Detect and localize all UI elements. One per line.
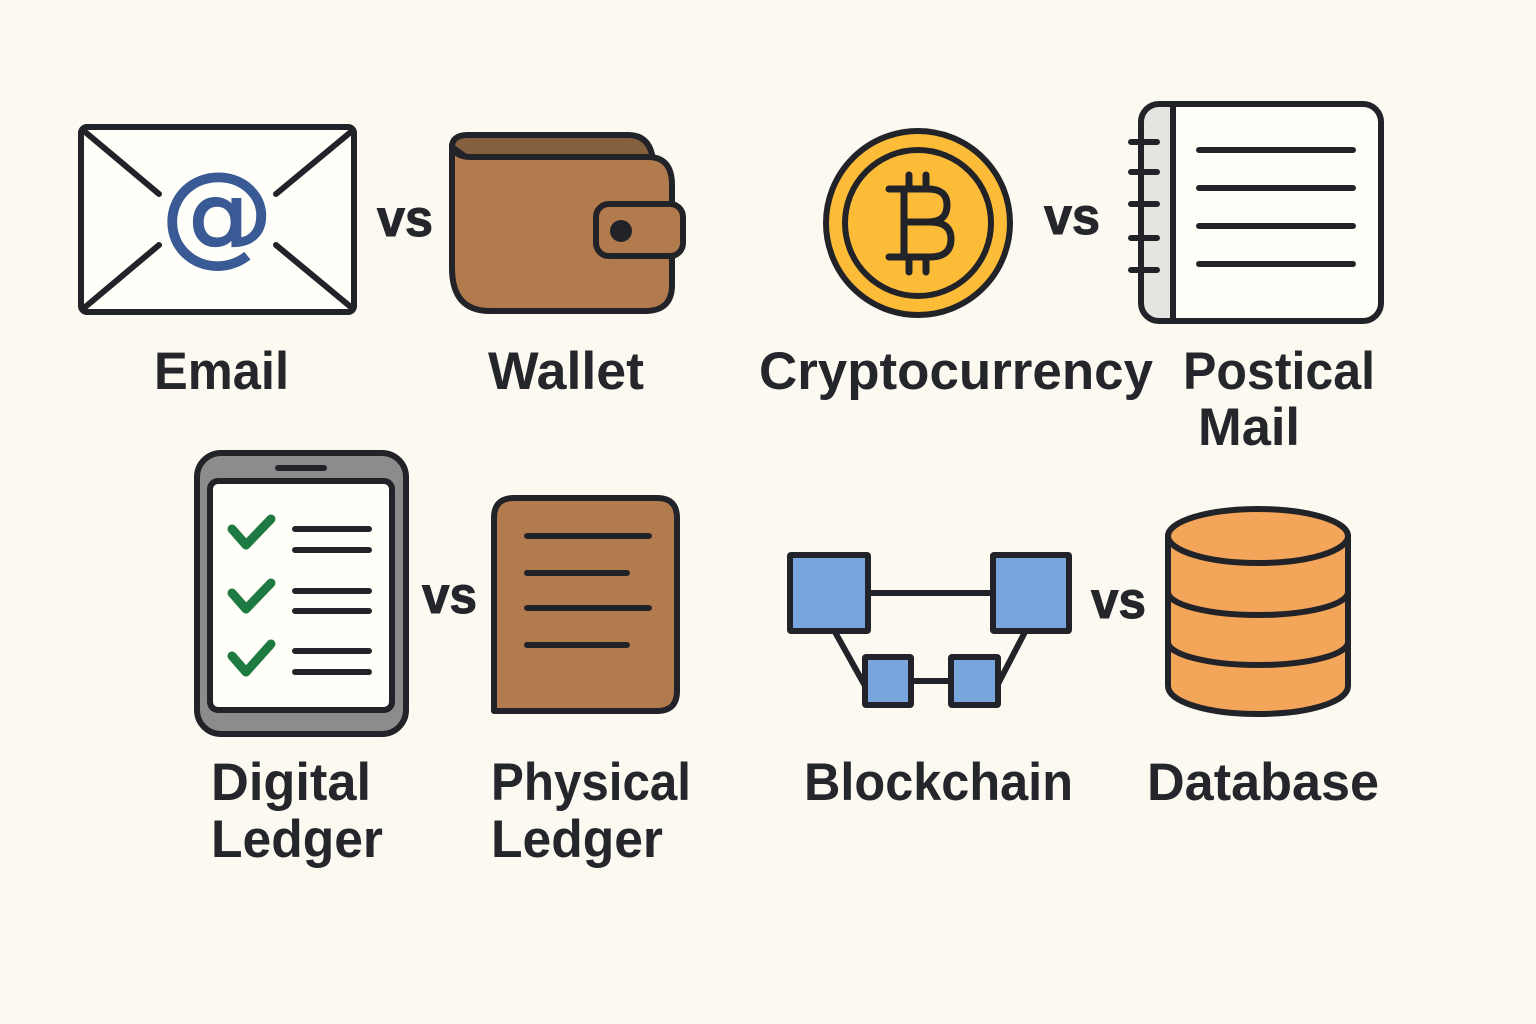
icon: envelope [81,127,354,312]
label: Postical Mail: Postical [1183,342,1375,401]
icon: blockchain network [790,555,1069,705]
panel: cryptocurrency vs postal mail [759,104,1381,457]
icon: database cylinder [1168,509,1348,714]
label: Digital Ledger: Ledger [211,810,383,869]
label: Postical Mail [1183,342,1375,457]
icon: wallet [452,135,683,311]
icon: notebook [1131,104,1381,321]
label: Physical Ledger [491,753,691,869]
vs label: vs [422,567,477,625]
label: Database: Database [1147,753,1379,812]
label: Digital Ledger: Digital [211,753,371,812]
label: Postical Mail: Mail [1198,398,1300,457]
label: Physical Ledger: Physical [491,753,691,812]
panel: blockchain vs database [790,509,1379,812]
label: Blockchain: Blockchain [804,753,1073,812]
icon: paper ledger [494,498,677,711]
label: Cryptocurrency: Cryptocurrency [759,342,1154,401]
icon: bitcoin coin [826,131,1010,315]
icon: envelope: @ [161,149,273,277]
label: Email: Email [154,342,289,401]
vs label: vs [1044,188,1100,246]
panel: email vs wallet [81,127,683,401]
vs label: vs [1091,572,1146,630]
icon: tablet checklist [197,453,406,734]
vs label: vs [377,190,433,248]
label: Digital Ledger [211,753,383,869]
panel: digital ledger vs physical ledger [197,453,691,869]
label: Wallet: Wallet [488,342,644,401]
label: Physical Ledger: Ledger [491,810,663,869]
